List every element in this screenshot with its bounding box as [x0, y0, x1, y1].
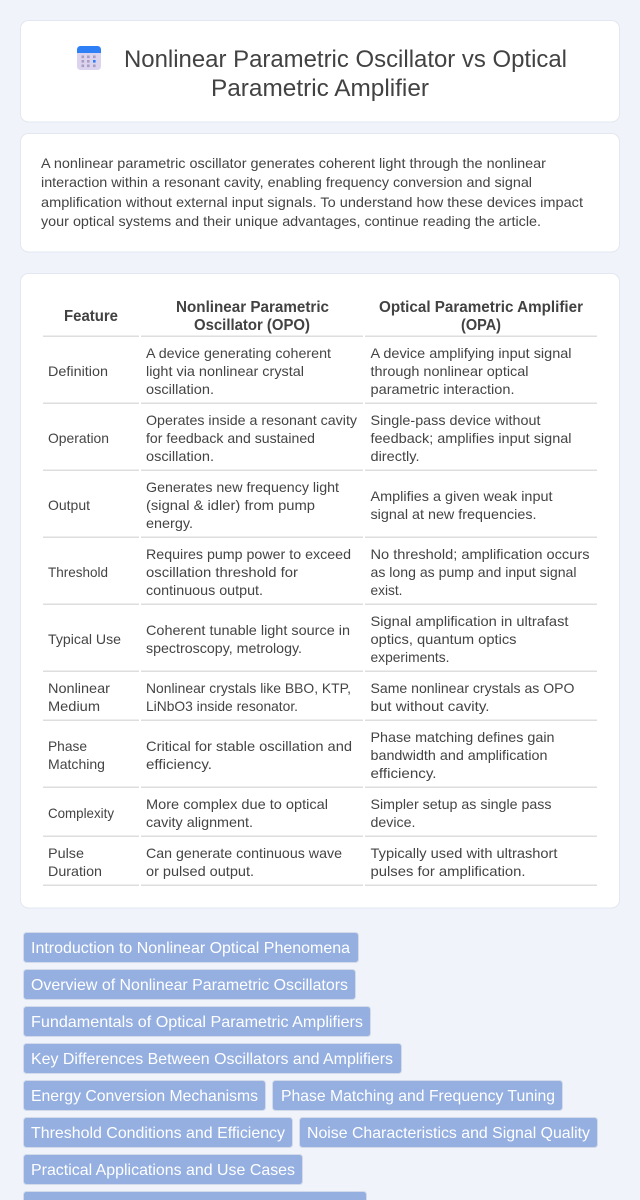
row: definition: Definition	[48, 363, 108, 379]
tag	[24, 970, 356, 1000]
row: pulse duration: pulses for amplification.	[370, 863, 526, 879]
row: phase matching: Phase matching defines gain	[370, 729, 554, 745]
row: nonlinear medium: Nonlinear	[48, 680, 110, 696]
row: complexity	[43, 796, 597, 837]
row: nonlinear medium: Medium	[48, 698, 100, 714]
tag: Key Differences Between Oscillators and Amplifiers	[31, 1051, 393, 1068]
row: pulse duration: Can generate continuous wave	[146, 845, 342, 861]
tag	[24, 1006, 370, 1036]
row: pulse duration: Duration	[48, 863, 102, 879]
row: typical use: optics, quantum optics	[370, 631, 516, 647]
tag	[24, 1044, 402, 1074]
row: definition: light via nonlinear crystal	[146, 363, 304, 379]
row: nonlinear medium	[43, 680, 597, 721]
tag: Phase Matching and Frequency Tuning	[281, 1088, 555, 1105]
tag	[24, 1154, 302, 1184]
row: definition: A device amplifying input signal	[370, 345, 572, 361]
row: complexity: cavity alignment.	[146, 814, 253, 830]
row: operation	[43, 412, 597, 471]
tag	[272, 1080, 562, 1110]
panel: introduction	[20, 134, 620, 252]
row: threshold: Threshold	[48, 564, 108, 580]
row: output: Generates new frequency light	[146, 479, 339, 495]
row: phase matching: bandwidth and amplification	[370, 747, 548, 763]
intro text	[41, 155, 583, 229]
tag: Energy Conversion Mechanisms	[31, 1088, 258, 1105]
row: typical use: experiments.	[370, 649, 450, 665]
tag: Fundamentals of Optical Parametric Amplifiers	[31, 1014, 363, 1031]
tag: Noise Characteristics and Signal Quality	[307, 1125, 590, 1142]
title: Nonlinear Parametric Oscillator vs Optical	[124, 46, 567, 73]
row: complexity: Complexity	[48, 805, 114, 821]
tag: Overview of Nonlinear Parametric Oscillators	[31, 977, 348, 994]
row: threshold: as long as pump and input signal	[370, 564, 576, 580]
row: operation: for feedback and sustained	[146, 430, 315, 446]
tag	[24, 932, 358, 962]
row: pulse duration: Pulse	[48, 845, 84, 861]
row: definition: through nonlinear optical	[370, 363, 528, 379]
row: typical use: Typical Use	[48, 631, 121, 647]
row: output: energy.	[146, 515, 193, 531]
row: threshold: No threshold; amplification occurs	[370, 546, 590, 562]
row: nonlinear medium: LiNbO3 inside resonator.	[146, 698, 298, 714]
row: operation: oscillation.	[146, 448, 214, 464]
table header: Oscillator (OPO)	[194, 317, 310, 334]
panel: header	[20, 20, 620, 122]
row: operation: feedback; amplifies input signal	[370, 430, 572, 446]
row: definition	[43, 345, 597, 404]
row: nonlinear medium: Nonlinear crystals like BBO, KTP,	[146, 680, 351, 696]
row: nonlinear medium: Same nonlinear crystals as OPO	[370, 680, 575, 696]
row: output: signal at new frequencies.	[370, 506, 536, 522]
table header	[43, 299, 597, 337]
row: definition: parametric interaction.	[370, 381, 514, 397]
row: pulse duration: Typically used with ultrashort	[370, 845, 558, 861]
row: threshold	[43, 546, 597, 605]
row: output	[43, 479, 597, 538]
table header: Feature	[64, 308, 118, 325]
row: threshold: continuous output.	[146, 582, 263, 598]
tag: Practical Applications and Use Cases	[31, 1162, 295, 1179]
panel: comparison table	[20, 274, 620, 908]
row: operation: directly.	[370, 448, 420, 464]
row: complexity: device.	[370, 814, 416, 830]
row: typical use: Coherent tunable light source in	[146, 622, 350, 638]
tag	[24, 1080, 266, 1110]
row: phase matching: efficiency.	[146, 756, 212, 772]
intro text: your optical systems and their unique advantages, continue reading the article.	[41, 213, 541, 229]
row: phase matching: Matching	[48, 756, 105, 772]
row: definition: oscillation.	[146, 381, 214, 397]
row: operation: Operates inside a resonant cavity	[146, 412, 357, 428]
row: typical use	[43, 613, 597, 672]
row: threshold: Requires pump power to exceed	[146, 546, 351, 562]
row: phase matching	[43, 729, 597, 788]
row: nonlinear medium: but without cavity.	[370, 698, 490, 714]
row: pulse duration	[43, 845, 597, 886]
table header: Nonlinear Parametric	[176, 299, 329, 316]
title	[124, 46, 567, 102]
row: pulse duration: or pulsed output.	[146, 863, 254, 879]
title: Parametric Amplifier	[211, 75, 429, 102]
tag: Threshold Conditions and Efficiency	[31, 1125, 285, 1142]
row: complexity: More complex due to optical	[146, 796, 328, 812]
table header: Optical Parametric Amplifier	[379, 299, 583, 316]
row: operation: Single-pass device without	[370, 412, 541, 428]
row: phase matching: Phase	[48, 738, 87, 754]
row: threshold: exist.	[370, 582, 402, 598]
row: output: Output	[48, 497, 90, 513]
row: typical use: spectroscopy, metrology.	[146, 640, 302, 656]
tag	[24, 1118, 292, 1148]
intro text: amplification without external input signals. To understand how these devices impact	[41, 194, 583, 210]
intro text: interaction within a resonant cavity, enabling frequency conversion and signal	[41, 174, 532, 190]
row: complexity: Simpler setup as single pass	[370, 796, 552, 812]
row: phase matching: efficiency.	[370, 765, 436, 781]
topic tags	[24, 932, 598, 1200]
table header: (OPA)	[461, 317, 501, 334]
row: operation: Operation	[48, 430, 109, 446]
row: phase matching: Critical for stable oscillation and	[146, 738, 352, 754]
row: typical use: Signal amplification in ultrafast	[370, 613, 569, 629]
icon: calendar	[77, 46, 101, 70]
row: threshold: oscillation threshold for	[146, 564, 298, 580]
tag: Introduction to Nonlinear Optical Phenomena	[31, 940, 350, 957]
tag	[24, 1192, 366, 1200]
row: output: Amplifies a given weak input	[370, 488, 553, 504]
tag	[300, 1118, 598, 1148]
intro text: A nonlinear parametric oscillator generates coherent light through the nonlinear	[41, 155, 546, 171]
row: definition: A device generating coherent	[146, 345, 331, 361]
row: output: (signal & idler) from pump	[146, 497, 315, 513]
